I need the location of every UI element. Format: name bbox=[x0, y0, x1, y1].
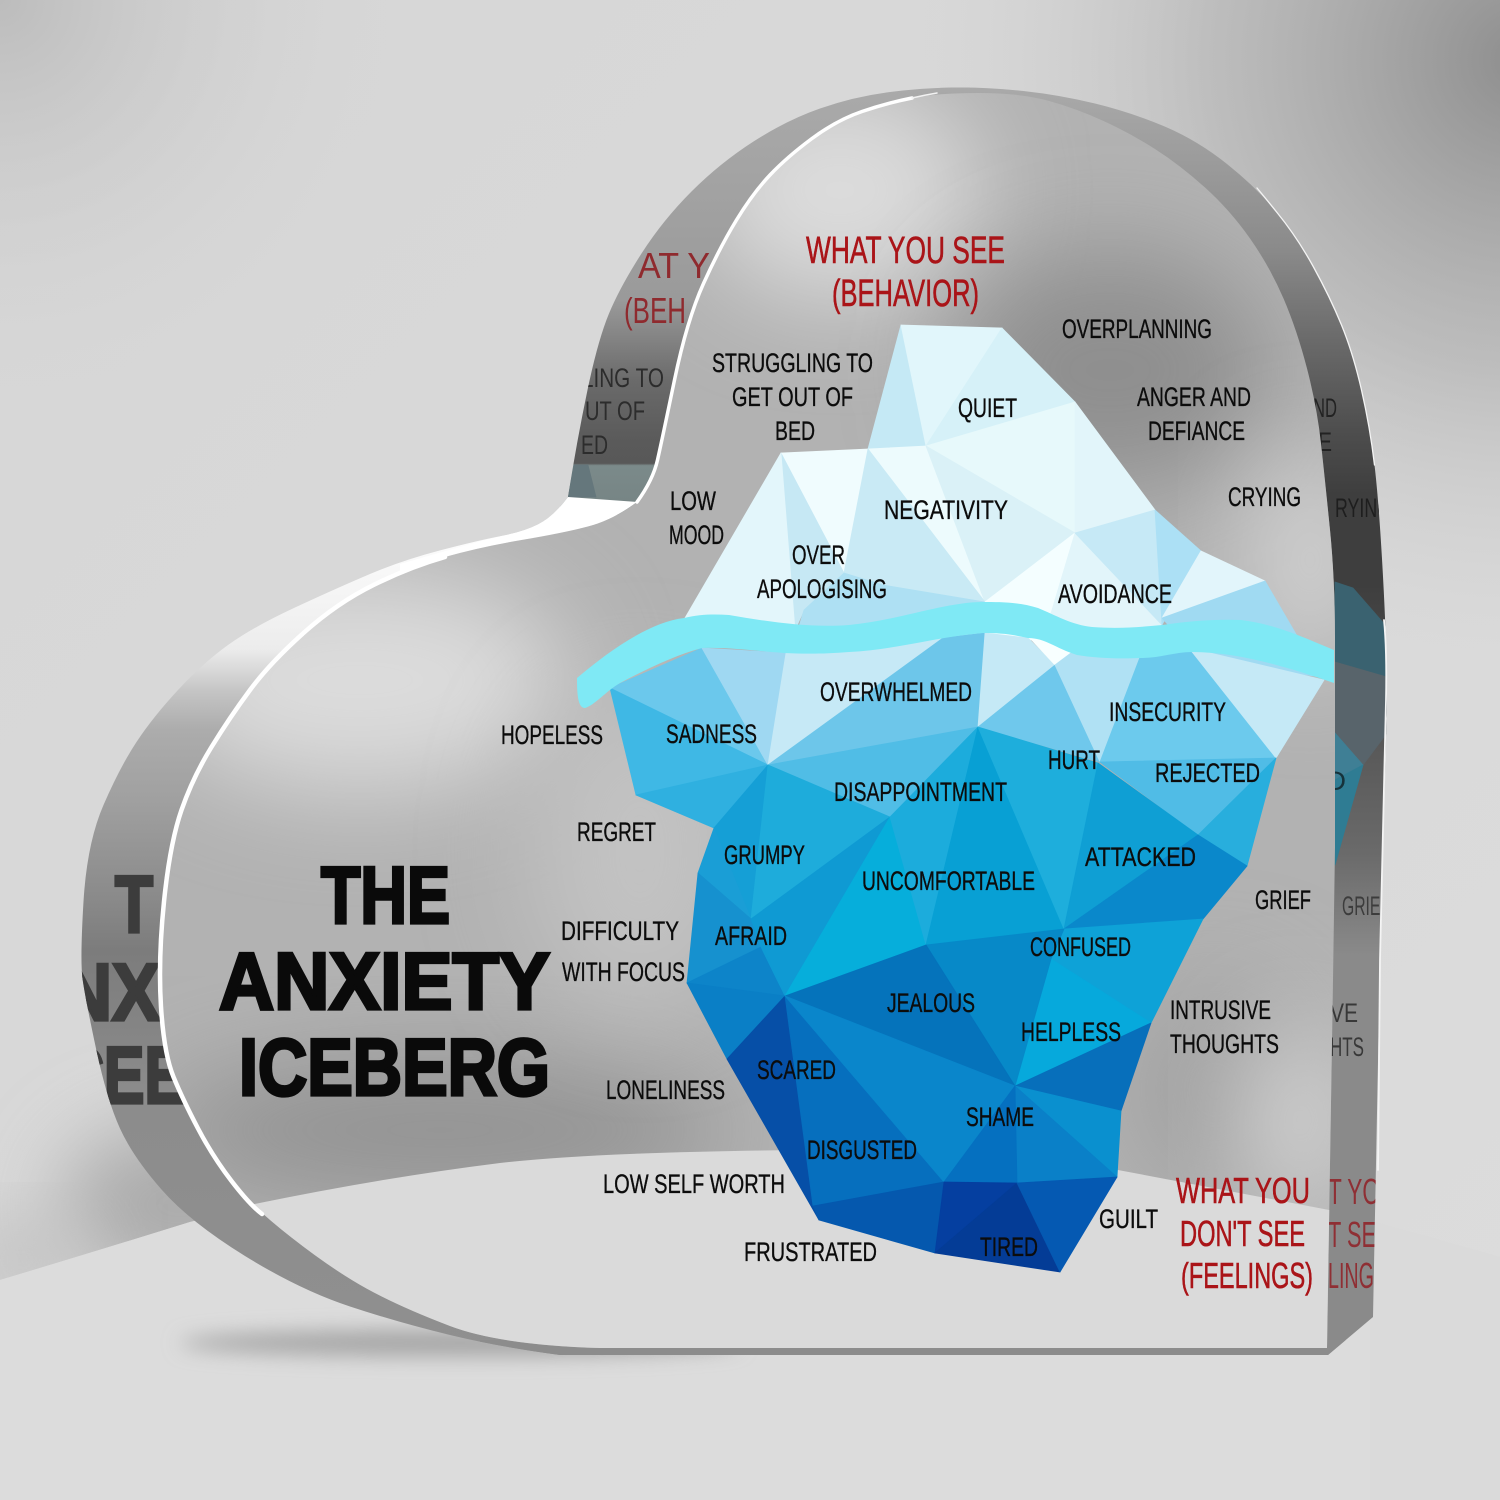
label: difficulty with focus bbox=[561, 916, 685, 987]
ghost right labels: VE bbox=[1330, 998, 1358, 1028]
label: intrusive thoughts: THOUGHTS bbox=[1170, 1029, 1279, 1059]
label: over apologising bbox=[757, 540, 887, 604]
ghost top labels bbox=[581, 245, 710, 460]
label: low self worth: LOW SELF WORTH bbox=[603, 1169, 785, 1199]
label: scared: SCARED bbox=[757, 1055, 836, 1085]
ghost title left: T bbox=[115, 860, 153, 950]
label: struggling to get out of bed bbox=[712, 348, 873, 446]
ghost top labels: (BEH bbox=[624, 290, 686, 331]
heading: what you see bbox=[806, 230, 1005, 315]
behavior labels bbox=[669, 314, 1301, 609]
title: The Anxiety Iceberg bbox=[219, 851, 550, 1113]
label: anger and defiance: ANGER AND bbox=[1137, 382, 1251, 412]
water line wave bbox=[577, 602, 1334, 708]
label: difficulty with focus: WITH FOCUS bbox=[562, 957, 685, 987]
reflected iceberg on right side wall bbox=[1335, 582, 1387, 865]
ground shadow below the heart bbox=[180, 1330, 740, 1356]
title: The Anxiety Iceberg: ANXIETY bbox=[219, 937, 550, 1027]
iceberg below water bbox=[610, 633, 1324, 1272]
feeling labels bbox=[501, 677, 1311, 1267]
label: quiet: QUIET bbox=[958, 393, 1017, 423]
label: regret: REGRET bbox=[577, 817, 656, 847]
label: attacked: ATTACKED bbox=[1085, 842, 1196, 872]
ghost right labels: ND bbox=[1313, 393, 1337, 423]
label: loneliness: LONELINESS bbox=[606, 1075, 725, 1105]
label: helpless: HELPLESS bbox=[1021, 1017, 1121, 1047]
label: anger and defiance bbox=[1137, 382, 1251, 446]
label: crying: CRYING bbox=[1228, 482, 1301, 512]
ghost title left: NX bbox=[60, 948, 160, 1038]
label: shame: SHAME bbox=[966, 1102, 1034, 1132]
label: over apologising: OVER bbox=[792, 540, 845, 570]
ghost right labels: HTS bbox=[1330, 1032, 1364, 1062]
label: grief: GRIEF bbox=[1255, 885, 1311, 915]
ghost right labels: T YO bbox=[1328, 1171, 1380, 1212]
ghost title left bbox=[82, 874, 184, 1105]
label: disgusted: DISGUSTED bbox=[807, 1135, 917, 1165]
label: anger and defiance: DEFIANCE bbox=[1148, 416, 1245, 446]
ghost right labels: T SE bbox=[1328, 1214, 1376, 1255]
label: rejected: REJECTED bbox=[1155, 758, 1260, 788]
ghost right labels: D bbox=[1326, 766, 1346, 796]
label: frustrated: FRUSTRATED bbox=[744, 1237, 877, 1267]
label: low mood: LOW bbox=[670, 486, 716, 516]
heart front face bbox=[140, 80, 1370, 1370]
ghost right labels: GRIEF bbox=[1342, 891, 1390, 921]
title: The Anxiety Iceberg: THE bbox=[321, 851, 450, 941]
ghost right labels: LING bbox=[1328, 1255, 1374, 1296]
label: insecurity: INSECURITY bbox=[1109, 697, 1226, 727]
label: overplanning: OVERPLANNING bbox=[1062, 314, 1212, 344]
label: guilt: GUILT bbox=[1099, 1204, 1158, 1234]
front edge highlight bbox=[160, 93, 1386, 1214]
label: afraid: AFRAID bbox=[715, 921, 787, 951]
label: jealous: JEALOUS bbox=[887, 988, 975, 1018]
label: struggling to get out of bed: GET OUT OF bbox=[732, 382, 853, 412]
label: over apologising: APOLOGISING bbox=[757, 574, 887, 604]
white glint at heart notch bbox=[400, 497, 637, 574]
ghost top labels: UT OF bbox=[585, 396, 645, 426]
heart acrylic block side wall bbox=[60, 85, 1400, 1380]
title: The Anxiety Iceberg: ICEBERG bbox=[239, 1023, 550, 1113]
label: hurt: HURT bbox=[1048, 745, 1100, 775]
ghost top labels: AT Y bbox=[638, 245, 710, 286]
iceberg above water bbox=[685, 325, 1321, 677]
ghost right labels bbox=[1314, 398, 1380, 1288]
heading: what you don't see: (FEELINGS) bbox=[1181, 1255, 1313, 1296]
ghost right labels: E bbox=[1318, 427, 1332, 457]
label: struggling to get out of bed: STRUGGLING TO bbox=[712, 348, 873, 378]
heading: what you see: (BEHAVIOR) bbox=[832, 273, 979, 315]
label: low mood bbox=[669, 486, 724, 550]
label: tired: TIRED bbox=[980, 1232, 1038, 1262]
floor reflection on front face bbox=[254, 1150, 1330, 1348]
label: confused: CONFUSED bbox=[1030, 932, 1131, 962]
label: overwhelmed: OVERWHELMED bbox=[820, 677, 972, 707]
label: grumpy: GRUMPY bbox=[724, 840, 805, 870]
heading: what you don't see bbox=[1176, 1170, 1313, 1296]
ghost top labels: ED bbox=[581, 430, 608, 460]
heading: what you don't see: WHAT YOU bbox=[1176, 1170, 1310, 1211]
heading: what you see: WHAT YOU SEE bbox=[806, 230, 1005, 272]
label: hopeless: HOPELESS bbox=[501, 720, 603, 750]
label: intrusive thoughts: INTRUSIVE bbox=[1170, 995, 1271, 1025]
label: uncomfortable: UNCOMFORTABLE bbox=[862, 866, 1035, 896]
label: struggling to get out of bed: BED bbox=[775, 416, 815, 446]
heading: what you don't see: DON'T SEE bbox=[1180, 1213, 1305, 1254]
ghost right labels: RYING bbox=[1335, 493, 1391, 523]
label: disappointment: DISAPPOINTMENT bbox=[834, 777, 1007, 807]
label: avoidance: AVOIDANCE bbox=[1058, 579, 1172, 609]
label: negativity: NEGATIVITY bbox=[884, 495, 1008, 525]
ghost top labels: LING TO bbox=[582, 363, 664, 393]
label: low mood: MOOD bbox=[669, 520, 724, 550]
ghost title left: CEE bbox=[60, 1031, 185, 1121]
label: intrusive thoughts bbox=[1170, 995, 1279, 1059]
label: difficulty with focus: DIFFICULTY bbox=[561, 916, 679, 946]
mirrored text seen through side wall bbox=[60, 245, 1391, 1296]
label: sadness: SADNESS bbox=[666, 719, 757, 749]
